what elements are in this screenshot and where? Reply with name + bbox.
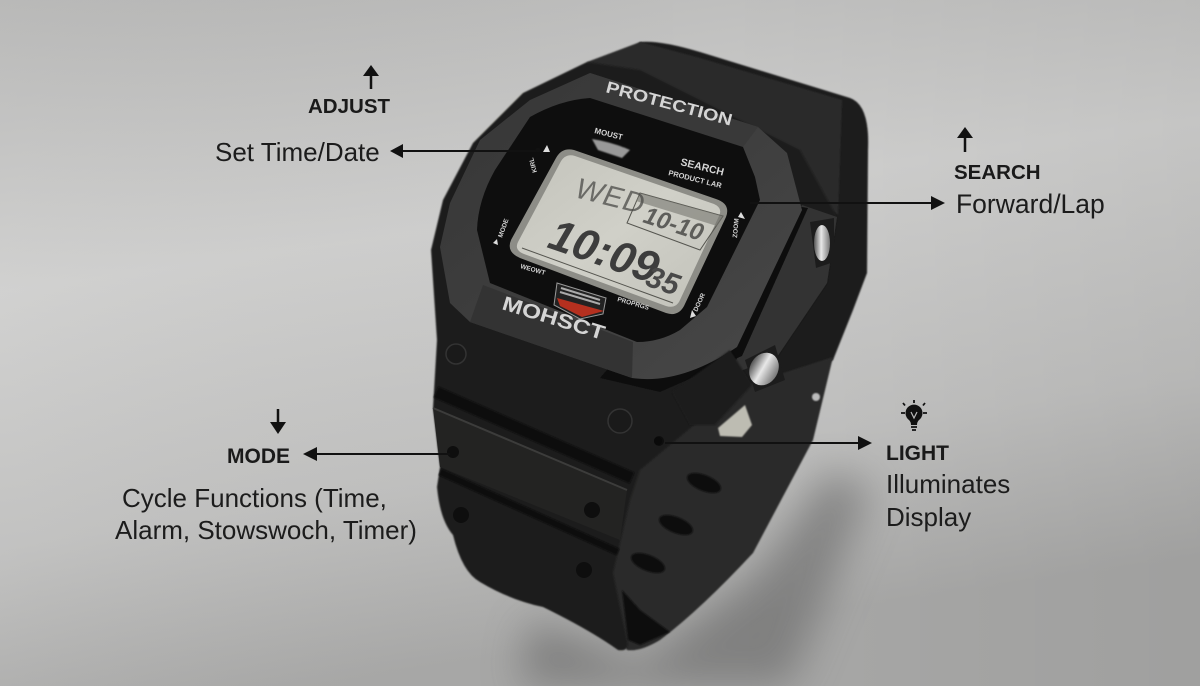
text: Cycle Functions (Time,: [122, 483, 387, 513]
bezel text: PROTECTION: [604, 78, 734, 130]
bezel text: PROPRGS: [616, 296, 650, 312]
text: Illuminates: [886, 469, 1010, 499]
bezel text: SEARCH: [679, 156, 725, 179]
bezel text: PRODUCT LAR: [668, 168, 723, 190]
bezel plate: top: [590, 73, 758, 147]
arrow: [390, 144, 540, 158]
LCD text: WED: [572, 173, 649, 221]
bezel text: MOUST: [594, 126, 624, 142]
icon: up arrow: [957, 127, 973, 152]
strap: top: [600, 42, 868, 440]
badge: [554, 283, 606, 319]
bezel text: MODE: [497, 217, 511, 239]
text: Alarm, Stowswoch, Timer): [115, 515, 417, 545]
heading: MODE: [227, 445, 290, 468]
clasp: [718, 405, 752, 437]
callout: SEARCH: [750, 127, 1105, 219]
icon: up arrow: [363, 65, 379, 89]
right side buttons: [743, 218, 834, 392]
bezel text: KIRL: [528, 157, 539, 173]
bezel: [440, 73, 802, 379]
face logos: [592, 139, 630, 158]
LCD text: 35: [642, 260, 685, 303]
bezel text: MOHSCT: [500, 293, 607, 345]
strap: right lower: [600, 357, 833, 650]
bezel black rim: [600, 200, 808, 392]
callout: MODE: [115, 409, 450, 545]
text: Forward/Lap: [956, 189, 1105, 219]
callout: ADJUST: [215, 65, 540, 167]
text: Set Time/Date: [215, 137, 380, 167]
heading: SEARCH: [954, 161, 1041, 184]
strap inner shadow: [622, 590, 670, 645]
top lug: [587, 42, 842, 215]
case side right: [730, 205, 837, 375]
arrow: [750, 196, 945, 210]
icon: down arrow: [270, 409, 286, 434]
arrow: [654, 436, 872, 450]
strap holes: [628, 469, 724, 577]
arrow: [303, 447, 450, 461]
LCD date box: [627, 193, 723, 250]
callout: LIGHT: [654, 400, 1010, 532]
LCD text: [543, 173, 707, 303]
LCD frame: [510, 149, 727, 314]
heading: ADJUST: [308, 95, 390, 118]
LCD screen: [517, 155, 720, 307]
LCD text: 10:09: [543, 210, 666, 293]
case and lower band: [431, 62, 837, 650]
button guard: [672, 350, 752, 425]
heading: LIGHT: [886, 442, 949, 465]
band block: [433, 408, 627, 540]
band rivets: [446, 344, 632, 433]
bezel text: WEOWT: [519, 263, 546, 277]
bezel text: ZOOM: [732, 218, 741, 238]
bezel text: [497, 78, 741, 345]
bezel plate: bottom: [470, 285, 633, 378]
icon: light bulb: [901, 400, 927, 430]
LCD text: 10-10: [640, 202, 707, 247]
text: Display: [886, 502, 971, 532]
small triangles: [493, 145, 745, 318]
face: [477, 98, 760, 342]
watch: [431, 42, 868, 650]
LCD line: [522, 248, 673, 303]
bezel text: DOOR: [692, 292, 707, 313]
